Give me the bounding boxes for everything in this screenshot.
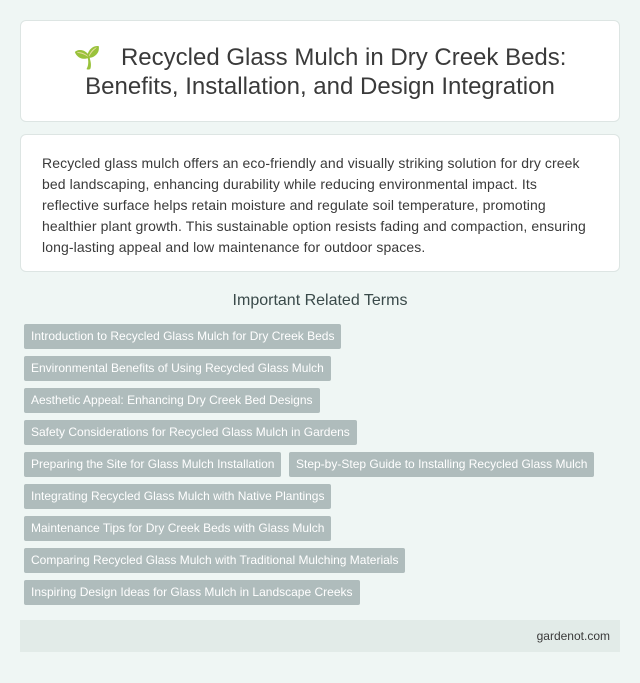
title [74, 44, 566, 100]
terms tags: Aesthetic Appeal: Enhancing Dry Creek Bed Designs [31, 393, 312, 407]
terms tags: Introduction to Recycled Glass Mulch for Dry Creek Beds [31, 329, 334, 343]
title: 🌱 Recycled Glass Mulch in Dry Creek Beds: [74, 44, 566, 71]
terms tags [24, 324, 594, 605]
terms heading: Important Related Terms [233, 292, 407, 309]
terms tags: Maintenance Tips for Dry Creek Beds with Glass Mulch [31, 521, 324, 535]
terms tags: Integrating Recycled Glass Mulch with Native Plantings [31, 489, 324, 503]
terms tags: Safety Considerations for Recycled Glass Mulch in Gardens [31, 425, 350, 439]
footer [20, 620, 620, 652]
description text: Recycled glass mulch offers an eco-friendly and visually striking solution for dry creek bed landscaping, enhancing durability while reducing environmental impact. Its reflective surface helps retain moisture and regulate soil temperature, promoting healthier plant growth. This sustainable option resists fading and compaction, ensuring long-lasting appeal and low maintenance for outdoor spaces. [42, 155, 586, 255]
title: Benefits, Installation, and Design Integration [85, 73, 555, 100]
terms tags: Environmental Benefits of Using Recycled Glass Mulch [31, 361, 324, 375]
title card [20, 20, 620, 122]
footer: gardenot.com [537, 629, 610, 643]
terms tags: Comparing Recycled Glass Mulch with Traditional Mulching Materials [31, 553, 398, 567]
terms tags: Step-by-Step Guide to Installing Recycled Glass Mulch [296, 457, 587, 471]
terms tags: Preparing the Site for Glass Mulch Installation [31, 457, 274, 471]
description card [20, 134, 620, 272]
terms tags: Inspiring Design Ideas for Glass Mulch in Landscape Creeks [31, 585, 352, 599]
